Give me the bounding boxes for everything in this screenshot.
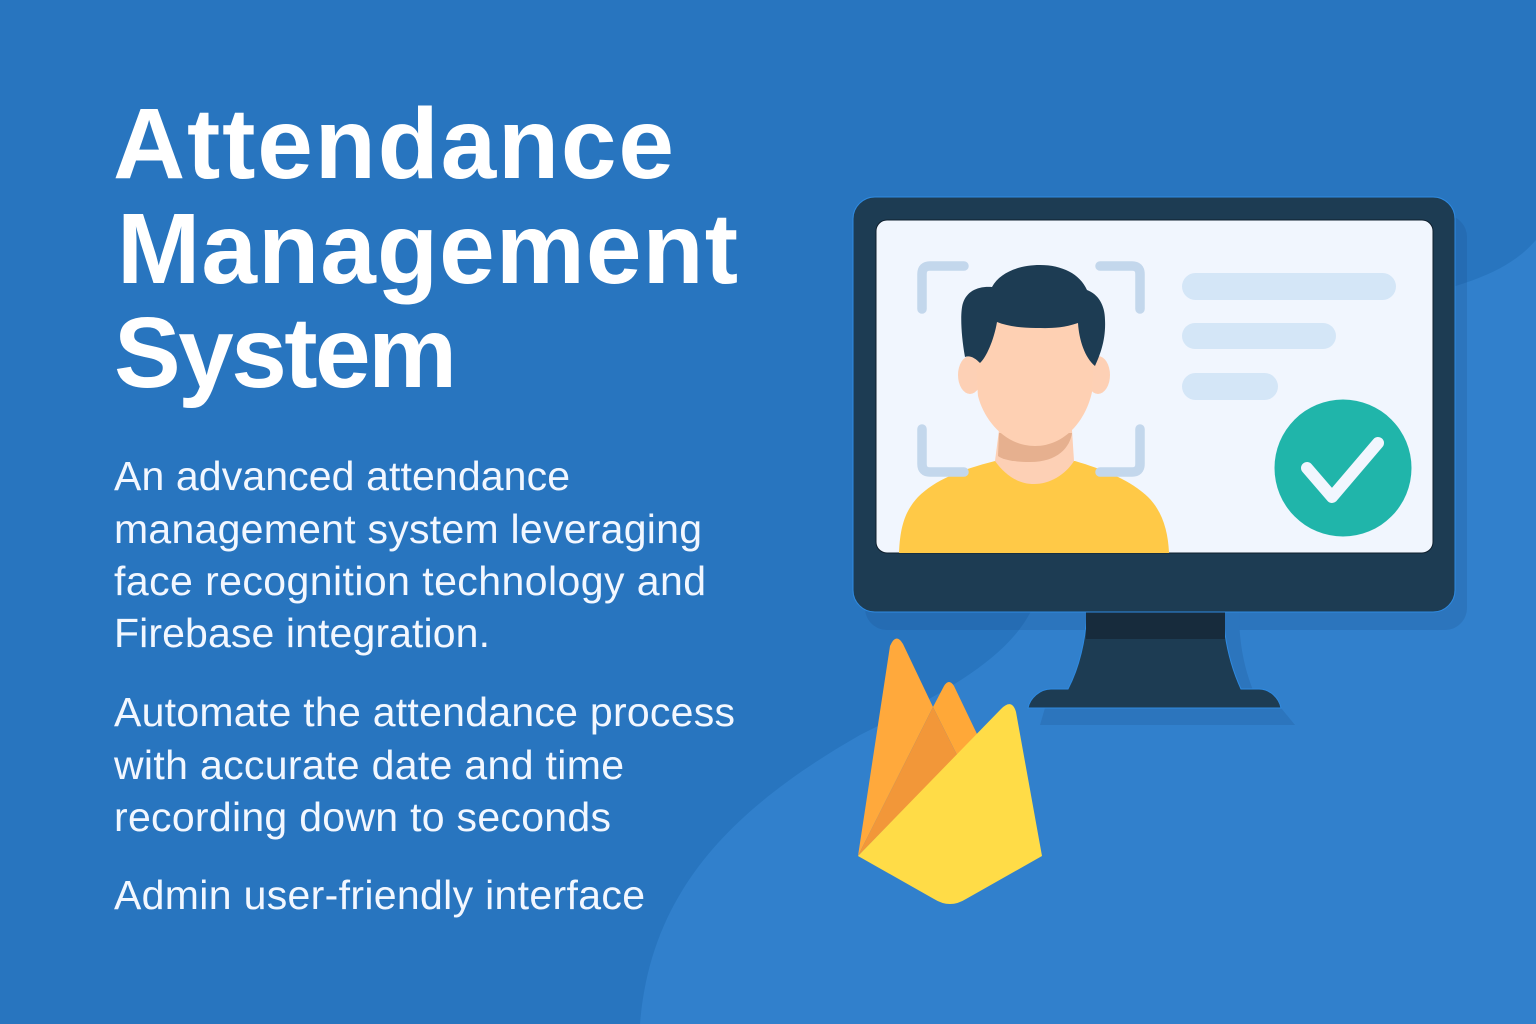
yellow body — [858, 704, 1042, 904]
face — [977, 298, 1093, 446]
automation text block: with accurate date and time — [113, 742, 624, 788]
flame overlap — [858, 707, 957, 856]
automation text block: Automate the attendance process — [114, 689, 735, 735]
ears — [958, 356, 982, 394]
person portrait — [899, 265, 1169, 553]
monitor screen — [876, 220, 1433, 553]
monitor frame — [853, 197, 1455, 612]
description text block: face recognition technology and — [114, 558, 706, 604]
description text block: An advanced attendance — [114, 453, 570, 499]
title — [113, 88, 738, 409]
info placeholder lines — [1182, 273, 1396, 400]
monitor stand — [1028, 610, 1281, 708]
automation text block — [113, 689, 735, 840]
monitor illustration — [853, 197, 1467, 725]
verified check badge — [1274, 400, 1412, 536]
neck shadow — [998, 433, 1072, 462]
left flame — [858, 638, 933, 856]
firebase logo — [858, 638, 1042, 904]
neck — [995, 430, 1074, 484]
monitor shadow — [865, 215, 1467, 725]
admin interface text: Admin user-friendly interface — [114, 872, 645, 918]
title: System — [114, 297, 457, 409]
title: Management — [117, 193, 738, 305]
face scan brackets — [922, 266, 1140, 472]
automation text block: recording down to seconds — [114, 794, 611, 840]
description text block — [114, 453, 706, 656]
hair — [961, 265, 1105, 366]
right flame — [933, 682, 977, 755]
description text block: management system leveraging — [114, 506, 702, 552]
shirt — [899, 461, 1169, 553]
title: Attendance — [113, 88, 674, 200]
description text block: Firebase integration. — [114, 610, 490, 656]
